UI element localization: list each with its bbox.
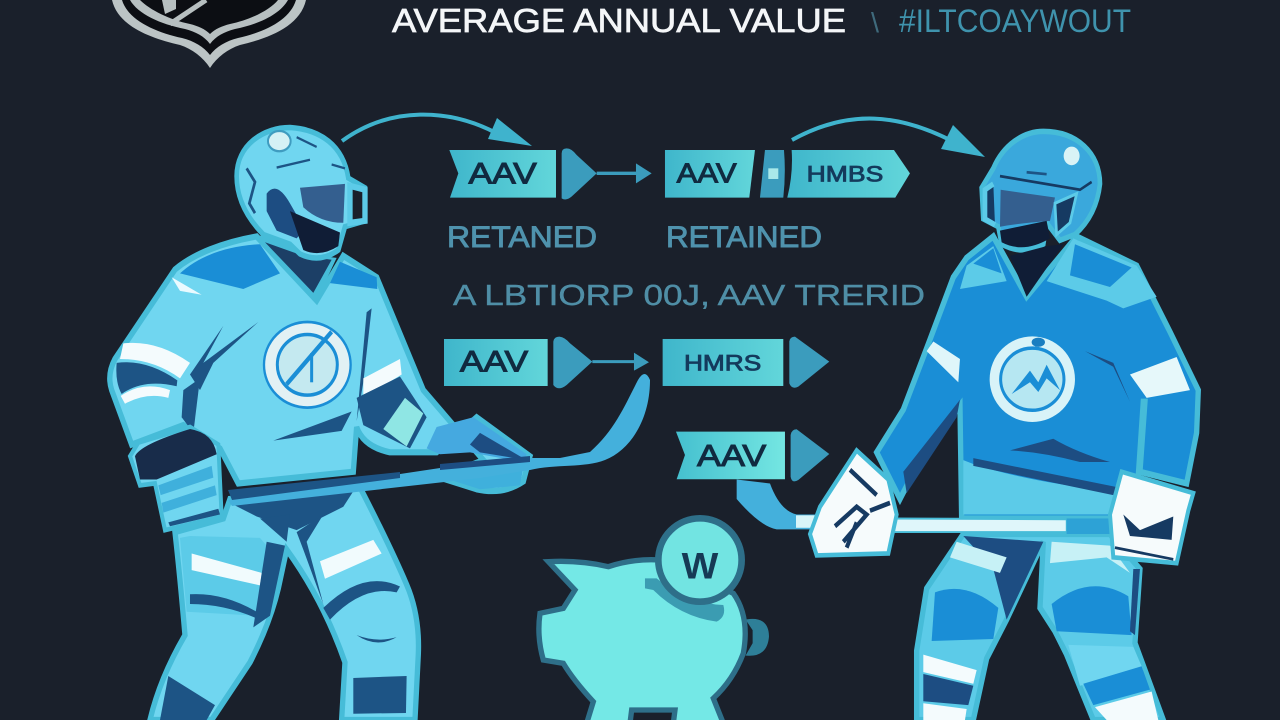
row 1: HMBS tag xyxy=(787,150,910,198)
title: \ xyxy=(871,7,879,38)
row 3: AAV tag: AAV xyxy=(460,345,529,378)
right player chest emblem xyxy=(990,336,1075,422)
row 4: pointer xyxy=(791,429,829,481)
right player stick xyxy=(737,480,1110,534)
left hockey player xyxy=(110,128,530,720)
left player hockey stick xyxy=(228,374,650,506)
title: AVERAGE ANNUAL VALUE xyxy=(392,2,846,39)
row 1: AAV tag xyxy=(449,150,556,198)
row 3: pointer xyxy=(789,337,829,388)
row 4: AAV tag: AAV xyxy=(697,439,767,473)
retained label two: RETAINED xyxy=(666,221,822,254)
right player helmet and face xyxy=(982,131,1100,297)
coin: W xyxy=(682,545,719,586)
coin xyxy=(658,518,742,602)
retained label one: RETANED xyxy=(447,221,597,254)
league shield logo xyxy=(112,0,306,68)
coin slot shadow xyxy=(645,578,724,622)
subtitle line: A LBTIORP 00J, AAV TRERID xyxy=(453,280,925,312)
left player chest emblem xyxy=(264,322,351,408)
piggy bank icon xyxy=(539,518,768,720)
pig tail xyxy=(747,620,768,655)
left player legs xyxy=(150,487,418,720)
pig body xyxy=(539,560,745,720)
row 3: HMRS tag xyxy=(663,339,783,386)
row 3: HMRS tag: HMRS xyxy=(684,351,761,376)
row 1: small divider chip xyxy=(760,150,785,198)
right player gloves xyxy=(810,450,1193,563)
right player jersey xyxy=(877,236,1198,518)
row 1: pointer with arrow xyxy=(562,148,652,199)
left player helmet and face xyxy=(237,128,365,258)
row 3: AAV tag xyxy=(444,339,548,386)
arrow: left player to first AAV tag xyxy=(342,115,532,146)
row 1: AAV tag: AAV xyxy=(468,157,537,190)
left player jersey xyxy=(110,234,530,491)
row 1: second AAV tag xyxy=(665,150,755,198)
row 1: HMBS tag: HMBS xyxy=(807,162,883,187)
right player legs xyxy=(917,534,1163,720)
row 1: second AAV tag: AAV xyxy=(677,158,737,189)
row 4: AAV tag xyxy=(676,432,785,479)
arrow: HMBS tag to right player xyxy=(792,119,985,157)
right hockey player xyxy=(737,131,1198,720)
left player gloves xyxy=(130,417,527,530)
title: #ILTCOAYWOUT xyxy=(899,3,1131,39)
title xyxy=(392,2,1131,39)
flow diagram xyxy=(444,148,910,481)
row 3: pointer with arrow xyxy=(553,337,649,388)
